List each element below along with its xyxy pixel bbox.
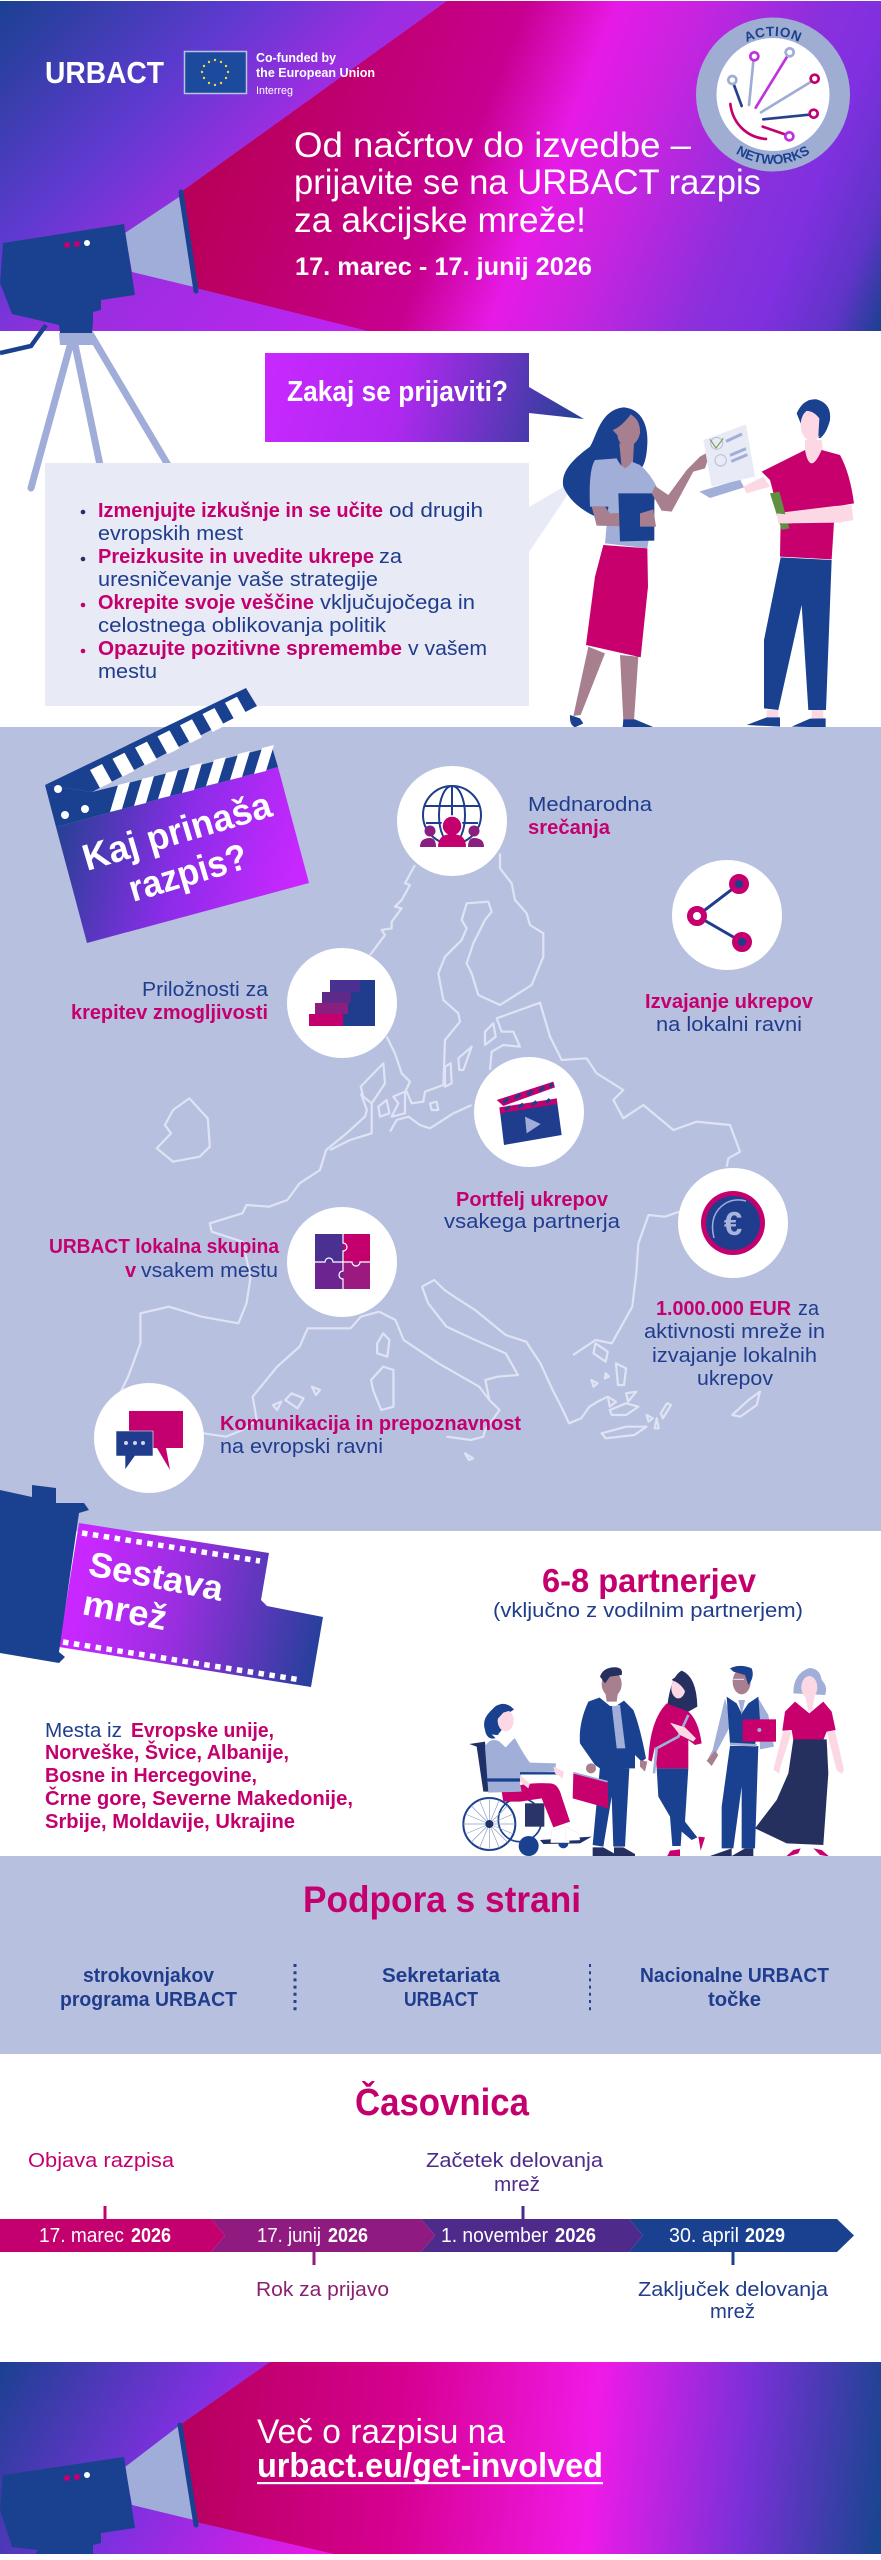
bullet 2: uresničevanje vaše strategije xyxy=(98,569,378,591)
item: international meetings: srečanja xyxy=(528,817,611,839)
panel: timeline xyxy=(0,2079,854,2323)
co-funded text: the European Union xyxy=(256,66,375,80)
timeline arrow: 1. november xyxy=(441,2225,548,2247)
support: national points: Nacionalne URBACT xyxy=(640,1965,829,1987)
man with laptop xyxy=(707,1666,776,1856)
bullet 3: Okrepite svoje veščine xyxy=(98,592,314,614)
bullet 4: v vašem xyxy=(408,638,487,660)
bullet 3 xyxy=(81,592,475,637)
header background xyxy=(0,1,881,331)
heading: clapperboard: Kaj prinaša xyxy=(78,784,277,879)
panel: what the call brings xyxy=(0,688,881,1531)
item: action portfolio: vsakega partnerja xyxy=(444,1211,621,1233)
illustration: two people with checklist xyxy=(563,399,854,727)
heading: film roll: mrež xyxy=(79,1584,170,1638)
title: Od načrtov do izvedbe – xyxy=(294,126,692,165)
call to action text xyxy=(257,2413,603,2485)
item: funding: 1.000.000 EUR xyxy=(656,1298,792,1320)
timeline arrow: 17. junij xyxy=(257,2225,321,2247)
item: capacity building xyxy=(71,948,397,1058)
countries text: Evropske unije, xyxy=(131,1720,274,1742)
countries text xyxy=(45,1720,353,1833)
callout: Zakaj se prijaviti: Zakaj se prijaviti? xyxy=(287,376,508,408)
URBACT logo: URBACT xyxy=(45,55,164,90)
item: funding xyxy=(644,1168,825,1390)
item: local actions: na lokalni ravni xyxy=(656,1014,802,1036)
item: funding: aktivnosti mreže in xyxy=(644,1321,825,1343)
panel: timeline: Časovnica xyxy=(355,2079,530,2124)
milestone: publication: Objava razpisa xyxy=(28,2150,175,2172)
heading: clapperboard xyxy=(45,688,309,943)
milestone: start of networks: mrež xyxy=(494,2174,540,2196)
icon: film camera with tripod xyxy=(0,192,196,488)
item: capacity building: krepitev zmogljivosti xyxy=(71,1002,268,1024)
EU flag xyxy=(184,52,246,94)
bullet 4: Opazujte pozitivne spremembe xyxy=(98,638,402,660)
woman with bag xyxy=(648,1671,705,1856)
timeline arrow: 17. marec xyxy=(39,2225,124,2247)
item: communication xyxy=(94,1383,521,1493)
call to action text: urbact.eu/get-involved xyxy=(257,2447,603,2485)
countries text: Mesta iz xyxy=(45,1720,122,1742)
item: funding: izvajanje lokalnih xyxy=(652,1345,817,1367)
item: local actions: Izvajanje ukrepov xyxy=(645,991,814,1013)
support: secretariat: URBACT xyxy=(404,1989,478,2011)
panel: reasons list xyxy=(45,463,579,706)
badge: Action Networks: NETWORKS xyxy=(736,146,809,164)
bullet 4: mestu xyxy=(98,661,157,683)
support: secretariat xyxy=(382,1965,501,2011)
item: action portfolio: Portfelj ukrepov xyxy=(456,1189,609,1211)
milestone: deadline xyxy=(256,2252,389,2301)
item: local actions xyxy=(645,860,814,1036)
item: communication: na evropski ravni xyxy=(220,1436,383,1458)
timeline arrow: 2026 xyxy=(131,2225,171,2247)
item: funding: € xyxy=(724,1205,742,1242)
bullet 2: Preizkusite in uvedite ukrepe xyxy=(98,546,374,568)
heading: film roll: Sestava xyxy=(85,1545,227,1609)
countries text: Srbije, Moldavije, Ukrajine xyxy=(45,1811,295,1833)
item: funding: za xyxy=(798,1298,820,1320)
item: local group xyxy=(49,1207,397,1317)
item: action portfolio xyxy=(444,1057,621,1233)
countries text: Norveške, Švice, Albanije, xyxy=(45,1740,289,1764)
bullet 3: vključujočega in xyxy=(320,592,475,614)
co-funded text: Interreg xyxy=(256,85,293,97)
item: capacity building: Priložnosti za xyxy=(142,979,269,1001)
milestone: deadline: Rok za prijavo xyxy=(256,2279,389,2301)
item: international meetings xyxy=(397,766,653,876)
item: local group: URBACT lokalna skupina xyxy=(49,1236,280,1258)
panel: network composition xyxy=(0,1485,881,1857)
partners count xyxy=(493,1562,803,1622)
older woman xyxy=(755,1668,844,1857)
timeline arrow xyxy=(0,2219,854,2252)
badge: Action Networks xyxy=(696,18,850,172)
milestone: start of networks xyxy=(426,2150,604,2219)
panel: support xyxy=(0,1856,881,2054)
icon: film camera xyxy=(0,2425,196,2554)
bullet 2 xyxy=(81,546,403,591)
milestone: end of networks: mrež xyxy=(710,2301,755,2323)
countries text: Črne gore, Severne Makedonije, xyxy=(45,1786,353,1810)
projector light beam xyxy=(181,1,881,331)
panel: header banner xyxy=(0,1,881,331)
co-funded text: Co-funded by xyxy=(256,51,336,65)
item: international meetings: Mednarodna xyxy=(528,794,653,816)
timeline arrow: 2029 xyxy=(745,2225,785,2247)
heading: film roll xyxy=(0,1485,323,1687)
man xyxy=(699,399,854,727)
item: local group: vsakem mestu xyxy=(141,1260,278,1282)
badge: Action Networks: ACTION xyxy=(746,26,802,42)
woman xyxy=(563,407,711,727)
item: local group: v xyxy=(125,1260,137,1282)
milestone: publication xyxy=(28,2150,175,2219)
bullet 1: evropskih mest xyxy=(98,523,243,545)
milestone: end of networks xyxy=(638,2252,829,2323)
dates: 17. marec - 17. junij 2026 xyxy=(295,253,592,281)
title: prijavite se na URBACT razpis xyxy=(294,163,761,202)
map of Europe xyxy=(120,853,760,1460)
partners count: 6-8 partnerjev xyxy=(542,1562,757,1599)
footer light beam xyxy=(180,2362,881,2554)
support: secretariat: Sekretariata xyxy=(382,1965,501,1987)
partners count: (vključno z vodilnim partnerjem) xyxy=(493,1600,803,1622)
support: national points xyxy=(640,1965,829,2011)
callout: Zakaj se prijaviti xyxy=(265,353,584,442)
timeline arrow: 2026 xyxy=(555,2225,596,2247)
illustration: group of five people xyxy=(463,1666,844,1857)
co-funded text xyxy=(256,51,375,97)
heading: clapperboard: razpis? xyxy=(124,836,252,910)
countries text: Bosne in Hercegovine, xyxy=(45,1765,257,1787)
title: za akcijske mreže! xyxy=(294,201,586,240)
bullet 4 xyxy=(81,638,487,683)
panel: support: Podpora s strani xyxy=(303,1879,581,1920)
bullet 1 xyxy=(81,500,483,545)
title xyxy=(294,126,761,240)
timeline arrow: 2026 xyxy=(328,2225,368,2247)
bullet 2: za xyxy=(379,546,403,568)
support: experts: strokovnjakov xyxy=(83,1965,215,1987)
support: experts: programa URBACT xyxy=(60,1989,237,2011)
call to action text: Več o razpisu na xyxy=(257,2413,505,2451)
item: funding: ukrepov xyxy=(697,1368,773,1390)
support: national points: točke xyxy=(708,1989,761,2011)
milestone: end of networks: Zaključek delovanja xyxy=(638,2279,829,2301)
support: experts xyxy=(60,1965,237,2011)
bullet 1: Izmenjujte izkušnje in se učite xyxy=(98,500,383,522)
item: communication: Komunikacija in prepoznavnost xyxy=(220,1413,521,1435)
man in suit xyxy=(573,1667,647,1856)
bullet 3: celostnega oblikovanja politik xyxy=(98,615,387,637)
person in wheelchair xyxy=(463,1704,592,1856)
milestone: start of networks: Začetek delovanja xyxy=(426,2150,604,2172)
timeline arrow: 30. april xyxy=(669,2225,739,2247)
panel: footer banner xyxy=(0,2362,881,2554)
bullet 1: od drugih xyxy=(389,500,483,522)
